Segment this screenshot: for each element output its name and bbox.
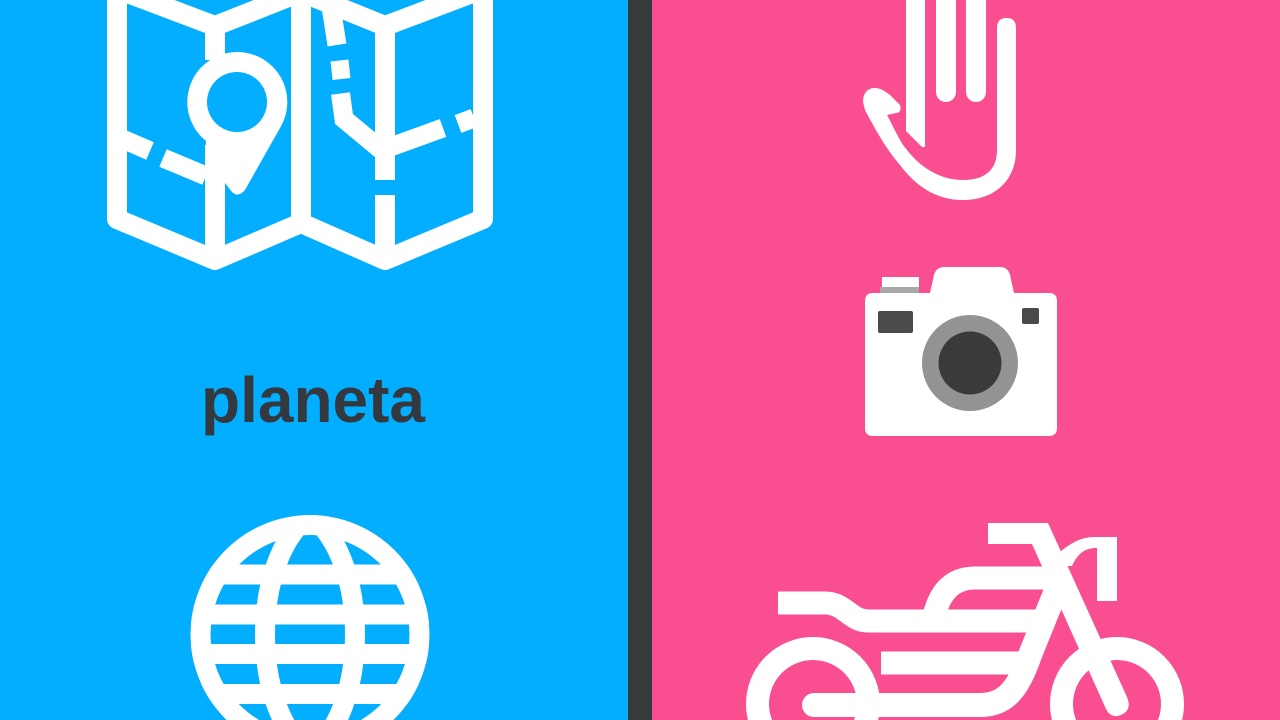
heading: planeta: planeta xyxy=(201,364,425,436)
camera lens xyxy=(922,315,1018,411)
panel: blue left xyxy=(0,0,628,720)
icon: location pin xyxy=(187,52,287,195)
icon: raised hand xyxy=(863,0,1016,200)
central dark divider xyxy=(628,0,652,720)
panel: pink right xyxy=(652,0,1280,720)
icon: folded map with pin xyxy=(117,0,483,260)
camera viewfinder right xyxy=(1022,308,1039,324)
camera body xyxy=(865,267,1057,436)
icon: camera xyxy=(865,267,1057,436)
camera viewfinder left xyxy=(878,311,913,333)
icon: globe xyxy=(180,515,440,720)
icon: motorcycle xyxy=(758,523,1172,720)
camera shutter button xyxy=(882,277,919,288)
